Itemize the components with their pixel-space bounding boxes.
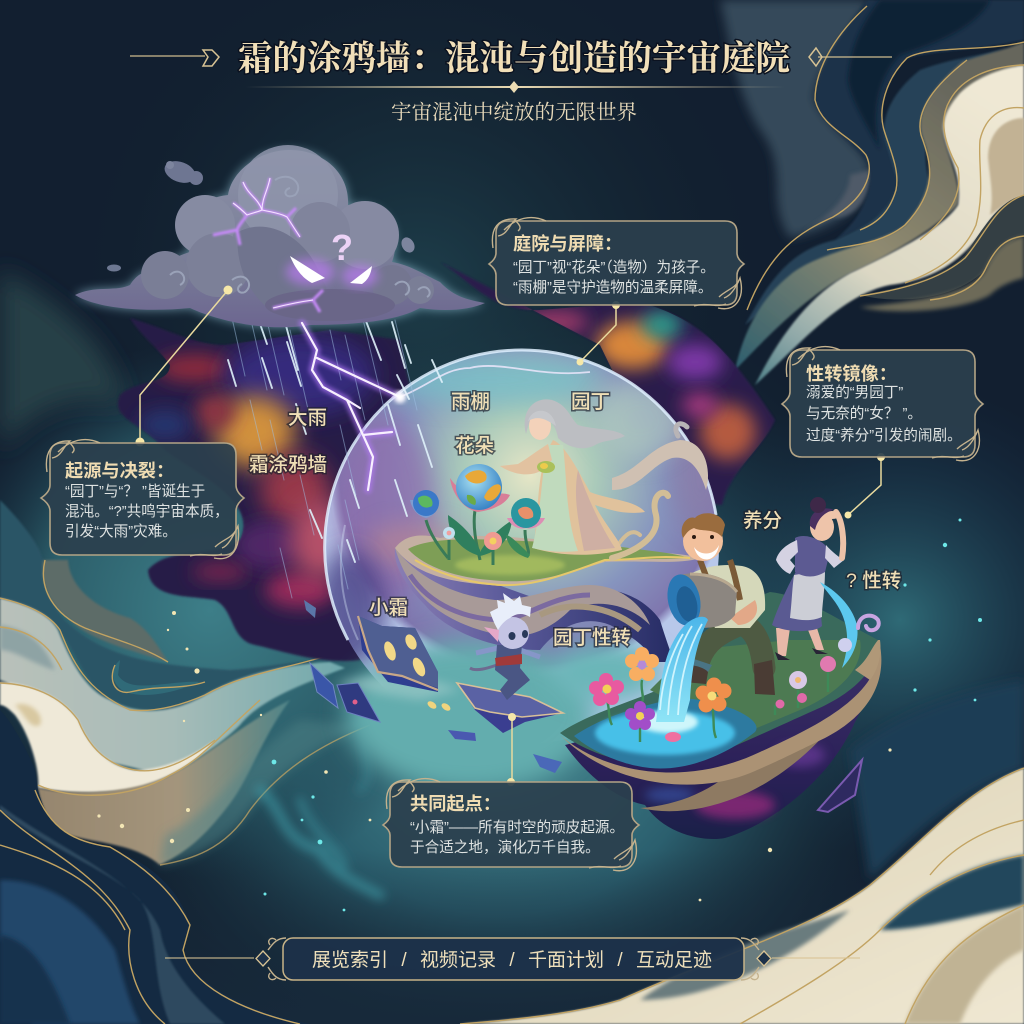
- stars: [97, 518, 982, 911]
- scene labels: 园丁: [571, 391, 610, 413]
- imp character: [470, 593, 540, 700]
- callout: origin and rupture: 引发“大雨”灾难。: [65, 523, 177, 540]
- floating shards and footprints: [304, 600, 862, 812]
- callout: origin and rupture: 起源与决裂：: [65, 461, 174, 481]
- callout: gender-swap mirror: [782, 347, 983, 461]
- callout: garden and barrier: 庭院与屏障：: [513, 233, 622, 254]
- bottom navigation bar: 千面计划: [528, 949, 604, 971]
- bottom navigation bar: 展览索引: [312, 949, 388, 971]
- swirl: upper right wave: [720, 0, 1024, 385]
- scene labels: 园丁性转: [553, 627, 631, 649]
- teal glow below island: [335, 640, 660, 790]
- lower floating island: [560, 592, 881, 839]
- title: 霜的涂鸦墙：混沌与创造的宇宙庭院: [238, 40, 790, 78]
- scene labels: 大雨: [288, 407, 327, 429]
- callout: common starting point: “小霜”——所有时空的顽皮起源。: [410, 819, 624, 836]
- bottom navigation bar: /: [401, 950, 407, 971]
- connector: canopy to garden callout: [576, 301, 620, 366]
- swirl: lower right cream wave: [460, 680, 1024, 1024]
- rain streaks: [228, 315, 442, 598]
- callout: garden and barrier: [489, 218, 744, 309]
- subtitle: 宇宙混沌中绽放的无限世界: [391, 101, 637, 124]
- callout: origin and rupture: 混沌。“?”共鸣宇宙本质，: [65, 503, 229, 520]
- title ornament: left arrow: [130, 50, 219, 66]
- callout: gender-swap mirror: 与无奈的“女？ ”。: [806, 404, 922, 422]
- callout: origin and rupture: “园丁”与“？ ”皆诞生于: [65, 483, 205, 500]
- second gardener woman: [772, 497, 844, 660]
- storm cloud: ?: [331, 227, 353, 268]
- callout: gender-swap mirror: 溺爱的“男园丁”: [806, 384, 903, 401]
- scene labels: 养分: [743, 510, 782, 532]
- callout: common starting point: 于合适之地，演化万千自我。: [410, 839, 600, 856]
- nebula behind garden (right): [440, 262, 775, 505]
- title ornament: right arrow: [809, 48, 892, 66]
- callout: gender-swap mirror: 性转镜像：: [806, 363, 897, 384]
- bottom navigation bar: 视频记录: [420, 949, 496, 971]
- water pour and splash: [656, 582, 879, 722]
- connector: imp to start callout: [507, 713, 516, 786]
- swirl: lower left navy wave: [0, 710, 310, 1024]
- scene labels: 雨棚: [451, 391, 490, 413]
- bottom navigation bar: [165, 938, 860, 980]
- callout: common starting point: [383, 779, 639, 871]
- gardener woman: [500, 399, 645, 555]
- scene labels: ? 性转: [846, 570, 901, 592]
- swirl: left wave: [0, 270, 370, 865]
- storm cloud: [75, 145, 485, 327]
- callout: garden and barrier: “雨棚”是守护造物的温柔屏障。: [513, 278, 712, 296]
- scene labels: 小霜: [369, 597, 408, 619]
- nebula behind garden (left): [118, 318, 420, 661]
- floating tablet with footprints: [358, 616, 438, 692]
- glass canopy bubble: [315, 350, 730, 744]
- flowers on lower island: [589, 638, 852, 742]
- upper floating island: [395, 535, 700, 662]
- flowing ribbons and vines: [612, 424, 708, 558]
- gardener man with bucket: [663, 513, 775, 695]
- scene labels: 花朵: [455, 435, 494, 457]
- scene labels: [249, 391, 901, 649]
- connector: storm to origin callout: [136, 286, 232, 446]
- bottom navigation bar: /: [509, 950, 515, 971]
- bottom navigation bar: /: [617, 950, 623, 971]
- bottom navigation bar: 互动足迹: [636, 949, 712, 971]
- connector: gender-swap callout to woman: [844, 453, 885, 518]
- callout: common starting point: 共同起点：: [410, 794, 501, 814]
- lightning bolt: [302, 323, 406, 490]
- scene labels: 霜涂鸦墙: [249, 454, 327, 476]
- callout: gender-swap mirror: 过度“养分”引发的闹剧。: [806, 427, 962, 444]
- title divider: [245, 81, 785, 93]
- callout: origin and rupture: [41, 440, 244, 559]
- callout: garden and barrier: “园丁”视“花朵”（造物）为孩子。: [513, 259, 715, 276]
- globe flowers: [410, 464, 545, 565]
- aurora strands: [260, 700, 380, 895]
